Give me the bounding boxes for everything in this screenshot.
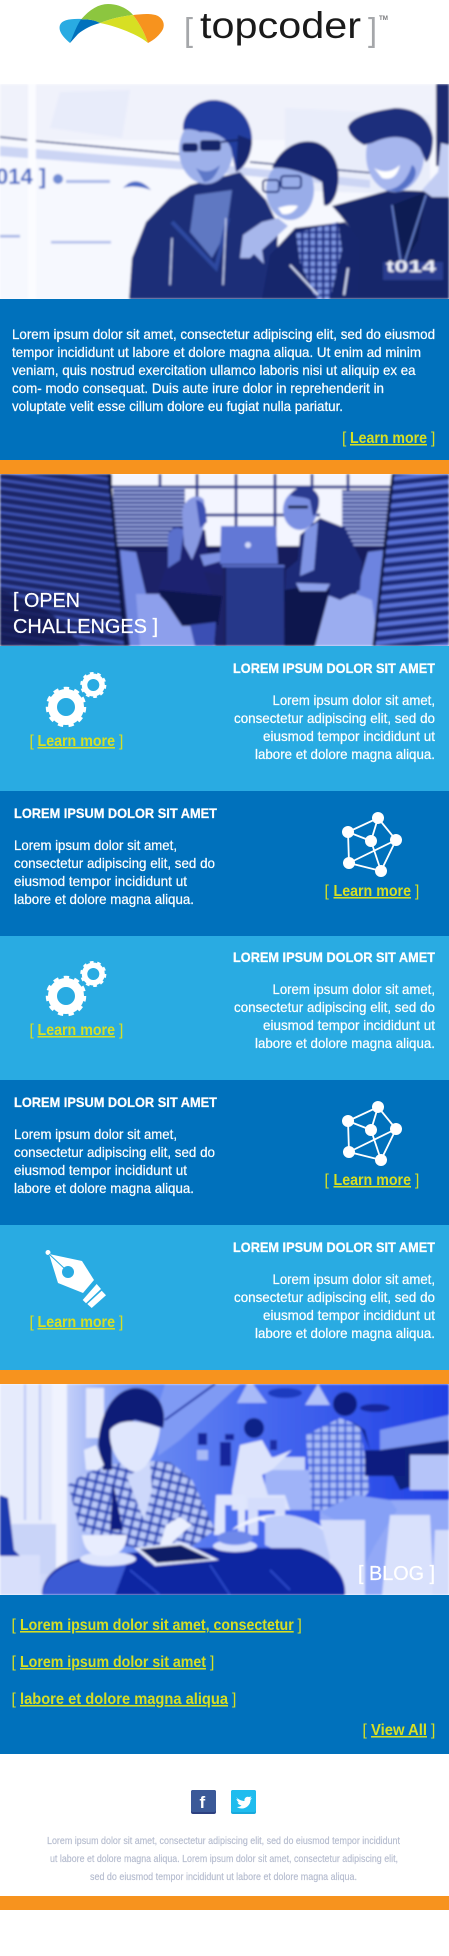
link: learn more: ] xyxy=(415,883,419,900)
orange divider xyxy=(0,460,449,474)
body text xyxy=(14,837,215,907)
link: learn more: [ xyxy=(30,1314,34,1331)
orange divider xyxy=(0,1370,449,1384)
footer text xyxy=(47,1835,400,1883)
sofas xyxy=(118,548,148,646)
link: learn more: ] xyxy=(119,1314,123,1331)
link: learn more: [ xyxy=(324,1172,330,1189)
body text: labore et dolore magna aliqua. xyxy=(255,746,435,762)
link: learn more: Learn more xyxy=(38,1022,115,1039)
logo wordmark: ] xyxy=(368,11,377,48)
link: learn more: ] xyxy=(119,1022,123,1039)
icon: topcoder swoosh xyxy=(60,4,164,43)
body text: labore et dolore magna aliqua. xyxy=(14,1180,194,1196)
heading: LOREM IPSUM DOLOR SIT AMET xyxy=(233,949,435,965)
logo wordmark: topcoder xyxy=(200,5,361,46)
photo: three developers: t014 xyxy=(386,257,437,276)
round table xyxy=(42,1548,345,1595)
icon: gears xyxy=(48,673,105,726)
link: learn more: ] xyxy=(415,1172,419,1189)
link: learn more: ] xyxy=(119,733,123,750)
body text: Lorem ipsum dolor sit amet, xyxy=(272,1271,435,1287)
footer xyxy=(47,1790,400,1883)
panel: challenge 5 xyxy=(0,1225,449,1370)
logo wordmark xyxy=(184,5,388,48)
heading: LOREM IPSUM DOLOR SIT AMET xyxy=(233,1239,435,1255)
link: learn more: Learn more xyxy=(334,883,411,900)
stools xyxy=(214,1495,245,1535)
panel: challenge 4 xyxy=(0,1080,449,1225)
framed pictures xyxy=(198,1433,234,1466)
icon: gears xyxy=(48,962,105,1014)
footer text: sed do eiusmod tempor incididunt ut labore et dolore magna aliqua. xyxy=(90,1871,357,1883)
link 1: ] xyxy=(298,1617,302,1634)
link 3: labore et dolore magna aliqua xyxy=(20,1691,228,1708)
link 2: Lorem ipsum dolor sit amet xyxy=(20,1654,206,1671)
heading: LOREM IPSUM DOLOR SIT AMET xyxy=(14,1094,217,1110)
body text: Lorem ipsum dolor sit amet, xyxy=(14,837,177,853)
man xyxy=(285,518,362,600)
table xyxy=(226,565,284,646)
link 1: Lorem ipsum dolor sit amet, consectetur xyxy=(20,1617,294,1634)
logo wordmark: TM xyxy=(379,15,388,22)
link 1: [ xyxy=(12,1617,16,1634)
intro text block: voluptate velit esse cillum dolore eu fugiat nulla pariatur. xyxy=(12,398,343,414)
link: learn more: ] xyxy=(431,430,435,447)
tablet xyxy=(134,1542,219,1566)
woman xyxy=(158,526,208,602)
body text: consectetur adipiscing elit, sed do xyxy=(234,1289,435,1305)
intro text block: veniam, quis nostrud exercitation ullamco laboris nisi ut aliquip ex ea xyxy=(12,362,416,378)
body text: consectetur adipiscing elit, sed do xyxy=(234,999,435,1015)
body text: eiusmod tempor incididunt ut xyxy=(263,1017,435,1033)
body text: eiusmod tempor incididunt ut xyxy=(14,873,187,889)
link 2: [ xyxy=(12,1654,16,1671)
body text: labore et dolore magna aliqua. xyxy=(255,1325,435,1341)
icon: twitter xyxy=(231,1790,256,1814)
link: view all: ] xyxy=(431,1722,435,1739)
photo: open challenges xyxy=(0,474,449,646)
heading: LOREM IPSUM DOLOR SIT AMET xyxy=(14,805,217,821)
panel: challenge 1 xyxy=(0,646,449,791)
icon: pen nib xyxy=(46,1250,106,1308)
person right xyxy=(332,190,449,299)
icon: network xyxy=(342,1101,402,1166)
photo: blog cafe xyxy=(0,1384,449,1595)
link: learn more: Learn more xyxy=(334,1172,411,1189)
heading: open challenges: [ OPEN xyxy=(13,590,80,612)
panel: blog links xyxy=(0,1595,449,1754)
body text: labore et dolore magna aliqua. xyxy=(255,1035,435,1051)
laptop xyxy=(220,526,278,564)
link: learn more: Learn more xyxy=(350,430,427,447)
intro text block xyxy=(12,326,435,414)
body text xyxy=(234,692,435,762)
saucer and cup xyxy=(80,1552,136,1566)
body text: eiusmod tempor incididunt ut xyxy=(263,728,435,744)
link: view all: [ xyxy=(362,1722,368,1739)
icon: facebook xyxy=(191,1790,216,1814)
icon: facebook: f xyxy=(200,1793,206,1812)
link: learn more: Learn more xyxy=(38,733,115,750)
link 3: [ xyxy=(12,1691,16,1708)
intro text block: Lorem ipsum dolor sit amet, consectetur adipiscing elit, sed do eiusmod xyxy=(12,326,435,342)
icon: network xyxy=(342,812,402,877)
heading: LOREM IPSUM DOLOR SIT AMET xyxy=(233,660,435,676)
orange footer bar xyxy=(0,1896,449,1910)
link 2: ] xyxy=(210,1654,214,1671)
side panels xyxy=(0,474,124,646)
body text: Lorem ipsum dolor sit amet, xyxy=(14,1126,177,1142)
right counter xyxy=(378,1414,449,1452)
body text: consectetur adipiscing elit, sed do xyxy=(234,710,435,726)
link: learn more: [ xyxy=(30,1022,34,1039)
body text xyxy=(234,1271,435,1341)
man at counter xyxy=(306,1418,370,1510)
intro text block: tempor incididunt ut labore et dolore magna aliqua. Ut enim ad minim xyxy=(12,344,421,360)
link: learn more: [ xyxy=(324,883,330,900)
link: learn more: Learn more xyxy=(38,1314,115,1331)
heading: open challenges: CHALLENGES ] xyxy=(13,616,158,638)
pendant lamps xyxy=(237,1384,267,1403)
heading: blog: [ BLOG ] xyxy=(358,1563,435,1585)
woman xyxy=(68,1460,215,1555)
heading: open challenges xyxy=(13,590,158,638)
plate with food xyxy=(213,1540,257,1552)
body text: Lorem ipsum dolor sit amet, xyxy=(272,692,435,708)
body text xyxy=(234,981,435,1051)
panel: challenge 2 xyxy=(0,791,449,936)
panel: intro xyxy=(0,299,449,460)
person centre xyxy=(262,222,365,299)
body text: eiusmod tempor incididunt ut xyxy=(263,1307,435,1323)
panel: challenge 3 xyxy=(0,936,449,1080)
body text: eiusmod tempor incididunt ut xyxy=(14,1162,187,1178)
link: learn more: [ xyxy=(342,430,347,447)
body text: consectetur adipiscing elit, sed do xyxy=(14,855,215,871)
intro text block: com- modo consequat. Duis aute irure dolor in reprehenderit in xyxy=(12,380,384,396)
body text: Lorem ipsum dolor sit amet, xyxy=(272,981,435,997)
chairs xyxy=(232,1514,335,1570)
body text: consectetur adipiscing elit, sed do xyxy=(14,1144,215,1160)
link: learn more: [ xyxy=(30,733,34,750)
body text: labore et dolore magna aliqua. xyxy=(14,891,194,907)
link: view all: View All xyxy=(371,1722,427,1739)
link 3: ] xyxy=(232,1691,236,1708)
seated person at counter xyxy=(232,1440,292,1510)
photo: three developers xyxy=(0,84,449,299)
body text xyxy=(14,1126,215,1196)
person left xyxy=(129,172,278,299)
logo wordmark: [ xyxy=(184,11,193,48)
logo xyxy=(60,4,388,48)
